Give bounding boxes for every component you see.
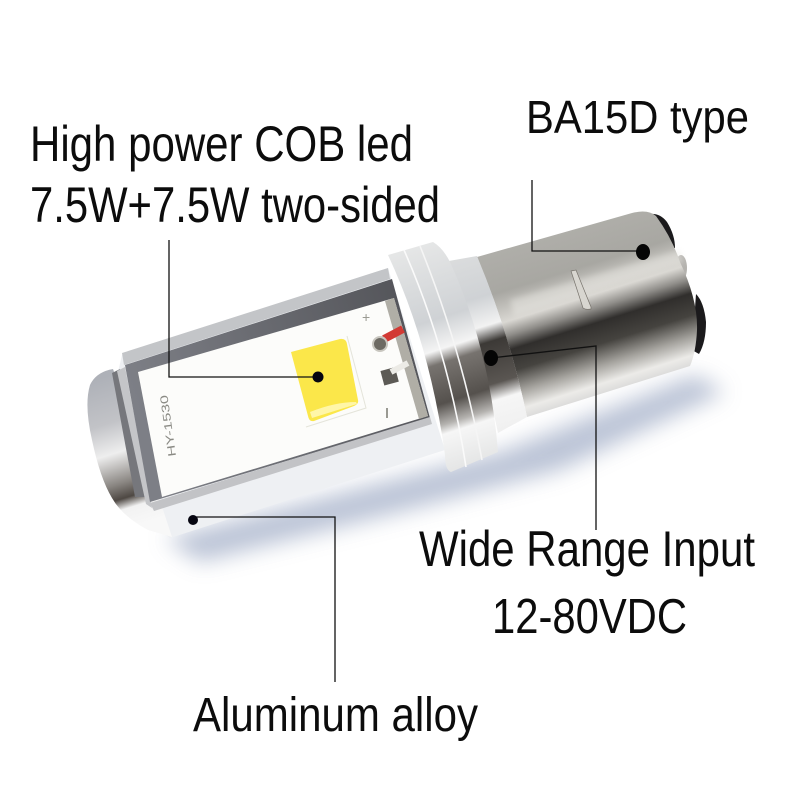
- metal base BA15D: [477, 212, 697, 417]
- contact: upper black terminal: [650, 214, 675, 248]
- callout: COB leader: [169, 240, 324, 382]
- collar groove 1: [404, 250, 466, 467]
- dot on body: [188, 515, 198, 525]
- LED bulb illustration: [87, 212, 706, 538]
- bulb shadow: [165, 375, 725, 562]
- white wire: [391, 363, 408, 372]
- label: COB led: [30, 116, 440, 233]
- lower solder pad: [380, 367, 399, 386]
- collar flange: [388, 242, 498, 472]
- callout: aluminium leader: [188, 515, 335, 682]
- label: base type: BA15D type: [526, 91, 749, 143]
- cap inner rim: [112, 369, 146, 497]
- label: input range: [419, 521, 755, 644]
- bottom rough edge: [150, 417, 432, 511]
- yellow COB chip: [291, 339, 358, 421]
- base locating pin: [571, 270, 591, 309]
- contact: lower black terminal: [692, 294, 706, 354]
- chip highlight: [310, 402, 357, 418]
- LED package edge: [306, 336, 366, 427]
- red wire: [384, 329, 403, 339]
- base bright streak: [510, 250, 684, 316]
- white PCB: [138, 298, 428, 497]
- label: COB led: High power COB led: [30, 116, 413, 172]
- dark frame: [125, 279, 430, 502]
- callout: input leader: [484, 346, 596, 530]
- dot on COB chip: [312, 372, 324, 382]
- label: material: Aluminum alloy: [193, 689, 478, 742]
- contact: centre silver stud: [675, 255, 687, 281]
- upper solder pad: [373, 337, 387, 351]
- PCB connector strip: [385, 298, 428, 419]
- callout: base leader: [532, 180, 650, 260]
- label: wattage: 7.5W+7.5W two-sided: [30, 177, 440, 233]
- PCB part label: HY-1530: [158, 394, 179, 457]
- end cap: [87, 369, 172, 537]
- label: voltage: 12-80VDC: [492, 590, 687, 644]
- collar groove 2: [420, 246, 482, 460]
- dot on base: [636, 244, 650, 260]
- body rough front edge: [117, 367, 152, 508]
- minus mark: [386, 408, 388, 418]
- base neck ring: [443, 256, 527, 433]
- aluminium body: [118, 268, 445, 538]
- plus mark: +: [362, 309, 370, 325]
- dot on collar: [484, 350, 498, 366]
- top rough edge: [122, 268, 390, 365]
